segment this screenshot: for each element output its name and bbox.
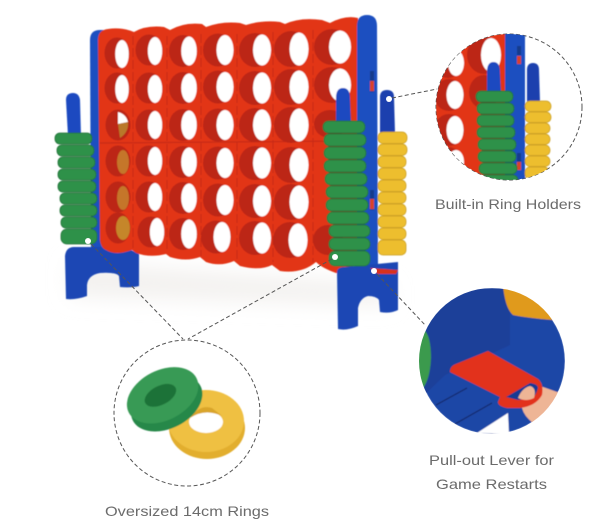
callout lines and anchors (85, 89, 437, 339)
board holes: column 2 (136, 34, 164, 248)
yellow ring (168, 390, 245, 459)
label: pull-out lever: Pull-out Lever for (429, 452, 554, 468)
left ring pole (66, 93, 81, 136)
red game board (98, 17, 358, 273)
board holes: column 4 (201, 34, 234, 254)
left blue post (90, 30, 106, 248)
right green ring stack (323, 121, 370, 266)
green ring in lever inset (419, 330, 432, 388)
board holes: column 6 (273, 31, 308, 258)
lever inset shading (424, 288, 510, 394)
callout: ring holders (434, 30, 582, 186)
floor gap (477, 413, 509, 434)
game frame illustration (55, 15, 407, 330)
green ring (117, 356, 212, 443)
board holes: column 3 (169, 35, 197, 250)
post slots (370, 71, 374, 210)
yellow ring pole (380, 90, 395, 133)
callout: oversized rings (114, 340, 260, 486)
hand (521, 386, 558, 422)
left foot (65, 247, 139, 299)
right foot (337, 262, 398, 330)
board holes: column 7 (313, 29, 351, 255)
yellow ring in lever inset (502, 288, 553, 321)
label: oversized rings: Oversized 14cm Rings (105, 503, 269, 519)
callout: pull-out lever (415, 285, 570, 434)
board holes: column 1 (104, 38, 130, 244)
lever handle opening (506, 383, 538, 400)
board holes: column 5 (239, 33, 271, 255)
label: pull-out lever (429, 452, 554, 492)
finger through handle (518, 386, 535, 400)
red lever (450, 351, 542, 408)
right blue post (357, 15, 378, 270)
slot lines (436, 388, 492, 424)
label: pull-out lever: Game Restarts (436, 476, 547, 492)
left green ring stack (55, 133, 97, 244)
pull-out lever (370, 268, 398, 274)
yellow ring stack (378, 132, 407, 255)
right ring pole (336, 88, 351, 122)
floor shadow (70, 262, 390, 305)
label: built-in ring holders: Built-in Ring Holders (435, 196, 581, 212)
board seams (100, 30, 358, 262)
